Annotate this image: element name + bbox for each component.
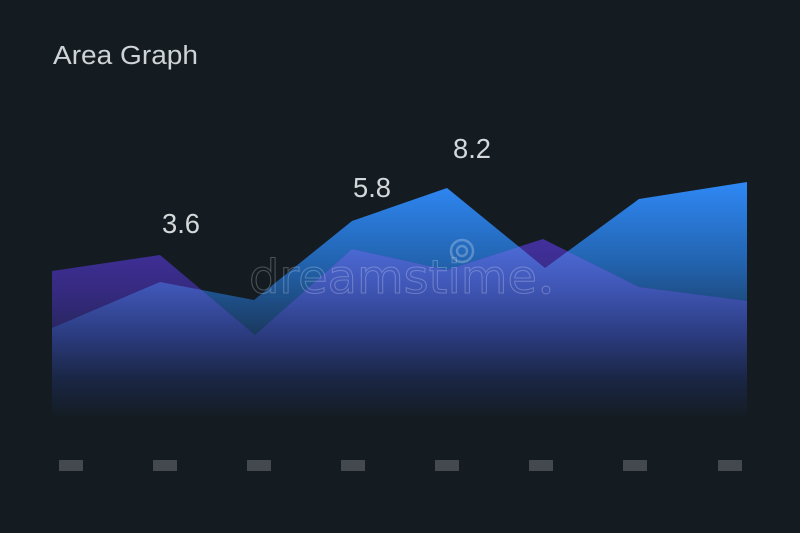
watermark text: dreamstime xyxy=(249,250,537,304)
tick 1 xyxy=(59,460,83,471)
tick 2 xyxy=(153,460,177,471)
x-axis tick placeholders xyxy=(59,460,742,471)
value label: 8.2: 8.2 xyxy=(453,133,491,164)
overlap of series xyxy=(52,246,747,380)
tick 7 xyxy=(623,460,647,471)
value label: 3.6: 3.6 xyxy=(162,208,200,239)
tick 6 xyxy=(529,460,553,471)
tick 3 xyxy=(247,460,271,471)
area series: blue xyxy=(52,182,747,420)
tick 5 xyxy=(435,460,459,471)
area chart xyxy=(52,182,747,420)
title: Area Graph xyxy=(53,42,198,70)
value label: 5.8: 5.8 xyxy=(353,172,391,203)
registered mark xyxy=(542,286,550,294)
infographic canvas xyxy=(52,45,747,471)
area series: purple xyxy=(52,239,747,420)
tick 4 xyxy=(341,460,365,471)
watermark spiral icon xyxy=(451,240,473,262)
tick 8 xyxy=(718,460,742,471)
watermark xyxy=(249,240,550,304)
